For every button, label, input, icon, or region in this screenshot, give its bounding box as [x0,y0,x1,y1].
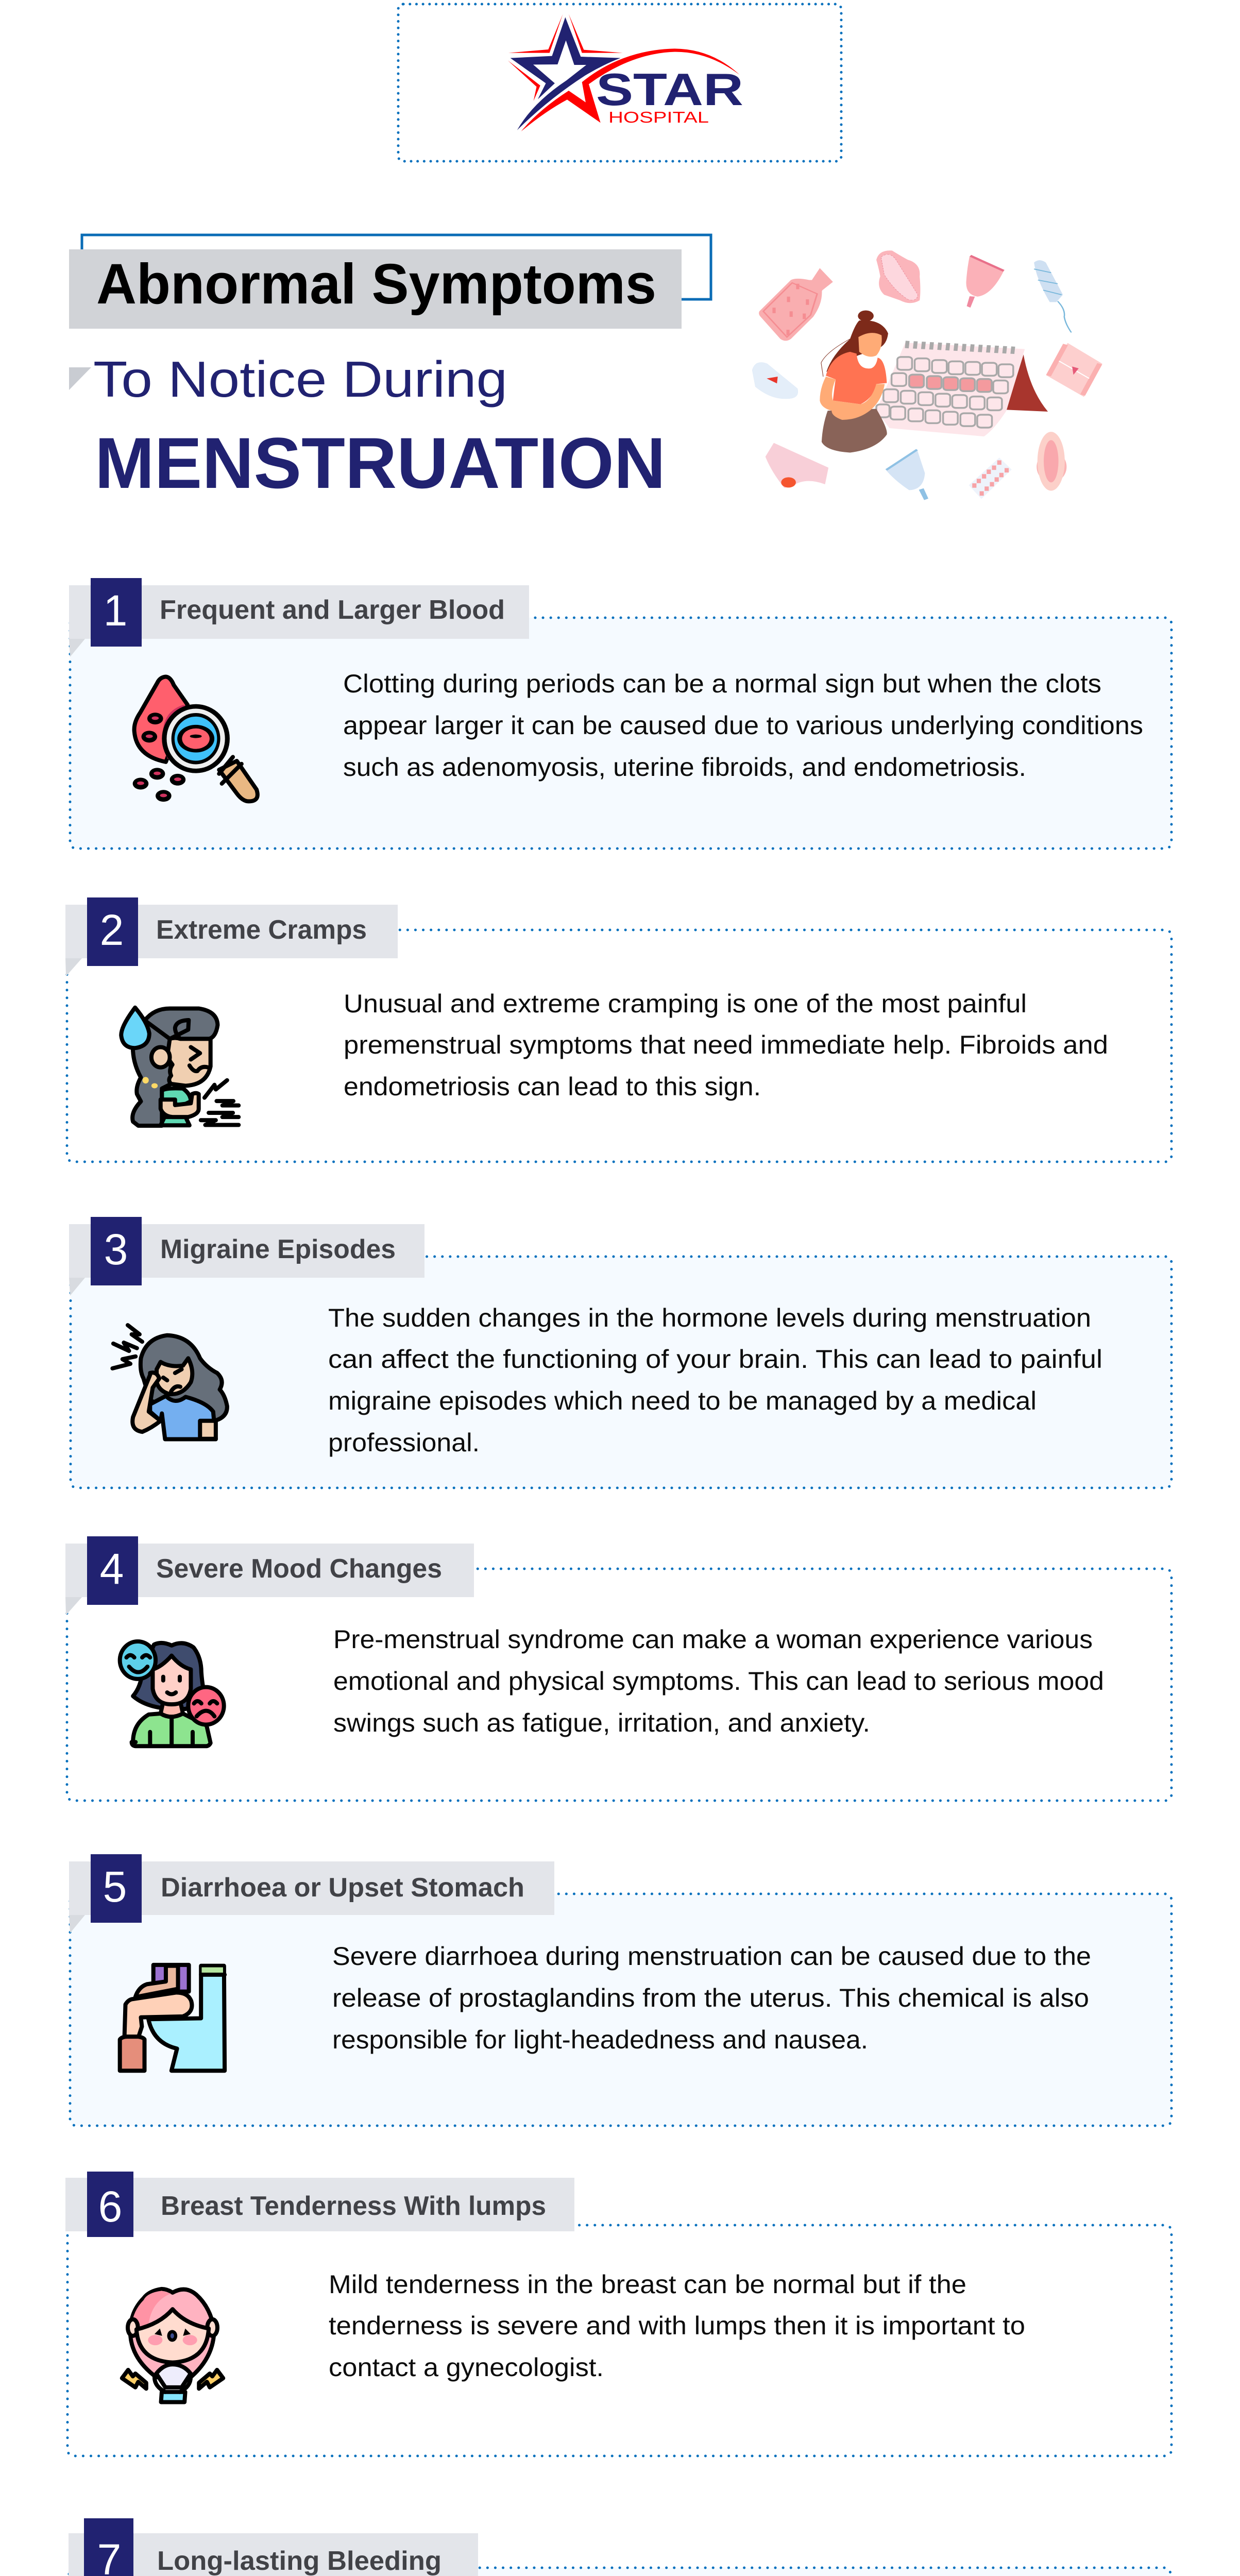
body text 1: Clotting during periods can be a normal sign but when the clots [343,669,1101,698]
body text 1: such as adenomyosis, uterine fibroids, and endometriosis. [343,753,1026,782]
heading: abnormal symptoms: Abnormal Symptoms [96,252,656,316]
body text 3: The sudden changes in the hormone levels during menstruation [328,1303,1091,1332]
body text 6: Mild tenderness in the breast can be normal but if the [329,2270,966,2299]
title block [69,235,711,503]
panel: symptom 6 [65,2172,1171,2456]
hero illustration: woman with cramps, calendar and period products [752,250,1102,500]
body text 4: swings such as fatigue, irritation, and anxiety. [333,1708,870,1737]
body text 3 [328,1303,1102,1457]
icon: girl with breast pain [122,2289,223,2402]
heading 2: Extreme Cramps [156,915,367,945]
body text 3: professional. [328,1428,480,1457]
logo wordmark STAR: STAR [596,64,743,115]
heading: to notice during: To Notice During [93,351,507,408]
body text 2 [344,989,1108,1101]
number badge 2: 2 [100,906,124,954]
body text 4 [333,1625,1104,1737]
logo panel [398,4,841,161]
heading 5: Diarrhoea or Upset Stomach [161,1873,524,1903]
icon: woman with cramps [121,1008,239,1126]
heading 1: Frequent and Larger Blood [160,595,505,625]
panel: symptom 5 [69,1854,1171,2126]
number badge 3: 3 [104,1225,128,1274]
body text 2: endometriosis can lead to this sign. [344,1072,761,1101]
body text 1 [343,669,1143,782]
icon: person on toilet [120,1965,225,2071]
heading 7: Long-lasting Bleeding [157,2546,441,2576]
body text 2: Unusual and extreme cramping is one of the most painful [344,989,1027,1018]
panel: symptom 1 [69,578,1171,849]
panel: symptom 4 [65,1536,1171,1801]
body text 3: migraine episodes which need to be managed by a medical [328,1386,1037,1415]
number badge 5: 5 [103,1862,127,1911]
icon: blood drop under magnifier [133,677,258,802]
body text 6 [329,2270,1025,2382]
panel: symptom 7 [69,2518,1170,2576]
heading 3: Migraine Episodes [160,1234,396,1264]
number badge 1: 1 [104,586,127,635]
body text 2: premenstrual symptoms that need immediate help. Fibroids and [344,1030,1108,1059]
number badge 6: 6 [98,2182,122,2231]
body text 5 [332,1942,1091,2054]
body text 4: emotional and physical symptoms. This can lead to serious mood [333,1667,1104,1696]
body text 1: appear larger it can be caused due to various underlying conditions [343,711,1143,740]
heading 4: Severe Mood Changes [156,1554,442,1584]
logo wordmark HOSPITAL: HOSPITAL [608,108,709,126]
body text 5: responsible for light-headedness and nausea. [332,2025,868,2054]
icon: woman with mood masks [120,1641,224,1746]
body text 5: release of prostaglandins from the uterus. This chemical is also [332,1984,1089,2012]
body text 4: Pre-menstrual syndrome can make a woman experience various [333,1625,1093,1654]
panel: symptom 3 [69,1217,1171,1488]
icon: woman with migraine [112,1325,227,1439]
number badge 4: 4 [100,1545,124,1593]
panel: symptom 2 [65,897,1171,1162]
body text 5: Severe diarrhoea during menstruation can be caused due to the [332,1942,1091,1971]
logo star mark [508,14,739,131]
heading: menstruation: MENSTRUATION [95,422,666,503]
body text 6: tenderness is severe and with lumps then it is important to [329,2311,1025,2340]
heading 6: Breast Tenderness With lumps [161,2191,546,2221]
body text 6: contact a gynecologist. [329,2353,604,2382]
body text 3: can affect the functioning of your brain. This can lead to painful [328,1345,1102,1374]
